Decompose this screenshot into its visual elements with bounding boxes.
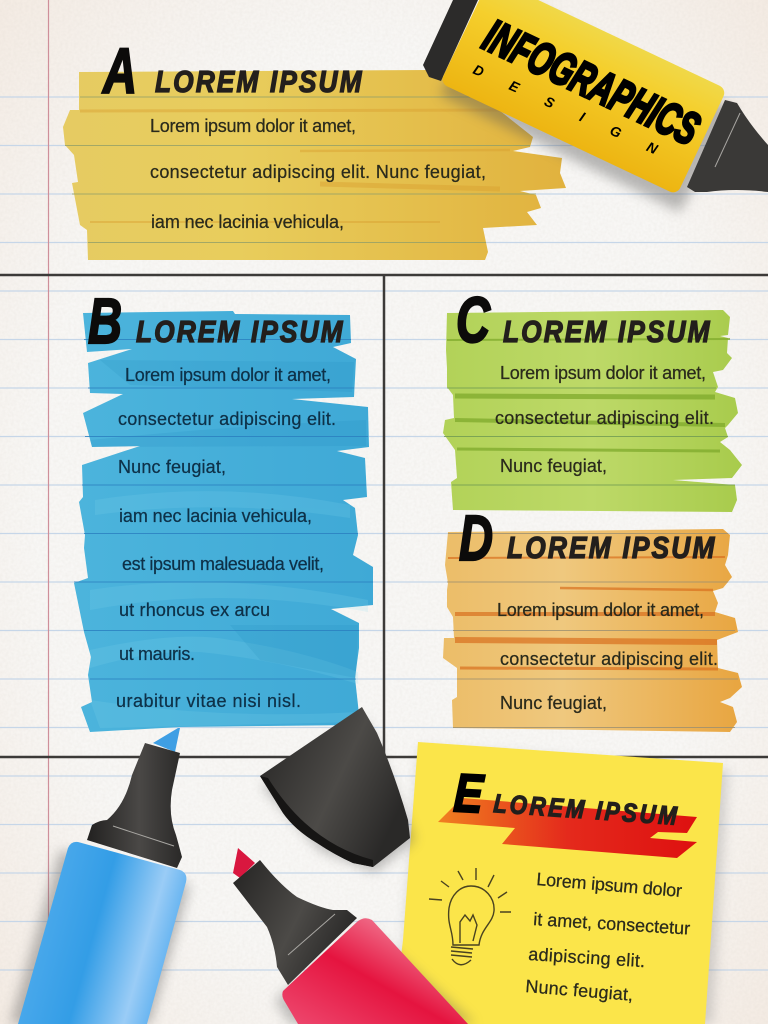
text E: adipiscing elit. — [528, 944, 646, 971]
text C: Nunc feugiat, — [500, 456, 607, 476]
text B: ut mauris. — [119, 644, 195, 664]
text D: Lorem ipsum dolor it amet, — [497, 600, 704, 620]
letter C: C — [456, 284, 491, 356]
text A: iam nec lacinia vehicula, — [151, 212, 344, 232]
text B: ut rhoncus ex arcu — [119, 600, 270, 620]
yellow highlighter marker — [423, 0, 768, 212]
red highlighter marker — [233, 848, 475, 1024]
text B: Nunc feugiat, — [118, 457, 226, 477]
heading E: LOREM IPSUM — [493, 789, 679, 831]
heading B: LOREM IPSUM — [136, 315, 344, 350]
red banner — [438, 798, 697, 858]
text E — [525, 869, 691, 1005]
text E: it amet, consectetur — [533, 909, 691, 939]
blue highlighter marker — [10, 728, 190, 1024]
text C: consectetur adipiscing elit. — [495, 408, 714, 428]
marker body — [18, 842, 186, 1024]
heading D: LOREM IPSUM — [507, 531, 715, 566]
note paper — [393, 742, 723, 1024]
marker grip — [233, 860, 357, 985]
text B: consectetur adipiscing elit. — [118, 409, 336, 429]
orange brush stroke — [443, 529, 742, 732]
marker cap end — [423, 0, 478, 81]
panel C: green highlighter — [443, 284, 742, 512]
panel A: yellow highlighter — [63, 35, 566, 260]
cap of marker — [260, 707, 415, 872]
marker body — [282, 918, 468, 1024]
marker tip — [687, 100, 768, 192]
text A: consectetur adipiscing elit. Nunc feugiat, — [150, 162, 486, 182]
marker grip — [87, 743, 182, 868]
yellow brush stroke — [63, 70, 566, 260]
sticky note — [393, 742, 728, 1024]
marker nib — [233, 848, 255, 878]
text B: Lorem ipsum dolor it amet, — [125, 365, 331, 385]
icon: light bulb — [429, 868, 511, 965]
text B: urabitur vitae nisi nisl. — [116, 691, 301, 711]
text C — [495, 363, 714, 476]
letter E: E — [452, 763, 486, 825]
text A — [150, 116, 486, 232]
green brush stroke — [443, 310, 742, 512]
panel D: orange highlighter — [443, 502, 742, 732]
text C: Lorem ipsum dolor it amet, — [500, 363, 706, 383]
text D — [497, 600, 718, 713]
blue brush stroke — [74, 311, 373, 732]
text E: Nunc feugiat, — [525, 976, 634, 1005]
heading C: LOREM IPSUM — [503, 315, 711, 350]
text B — [116, 365, 336, 711]
marker nib — [153, 728, 180, 752]
heading A: LOREM IPSUM — [155, 65, 363, 100]
marker body — [440, 0, 727, 195]
letter D: D — [459, 502, 493, 574]
letter A: A — [102, 35, 137, 107]
letter B: B — [88, 285, 122, 357]
text D: Nunc feugiat, — [500, 693, 607, 713]
text B: iam nec lacinia vehicula, — [119, 506, 312, 526]
text D: consectetur adipiscing elit. — [500, 649, 718, 669]
panel B: blue highlighter — [74, 285, 373, 732]
text A: Lorem ipsum dolor it amet, — [150, 116, 356, 136]
marker subtitle: DESIGN — [471, 61, 661, 157]
text B: est ipsum malesuada velit, — [122, 554, 324, 574]
text E: Lorem ipsum dolor — [536, 869, 683, 901]
